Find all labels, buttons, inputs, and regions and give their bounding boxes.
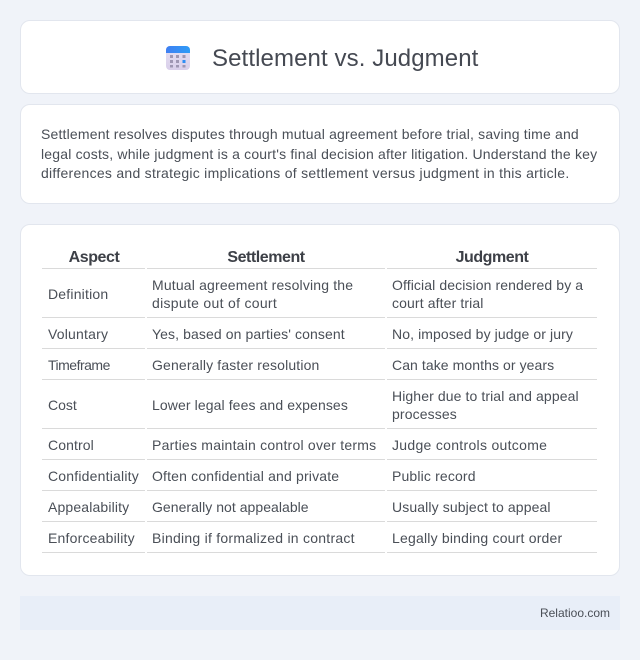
table header: Judgment: [456, 249, 528, 266]
row: cost: processes: [392, 406, 457, 422]
panel: title card: [20, 20, 620, 94]
row: cost: Higher due to trial and appeal: [392, 388, 579, 404]
row: definition: Mutual agreement resolving the: [152, 277, 353, 293]
row: timeframe: [48, 357, 554, 373]
row: appealability: [48, 499, 551, 515]
row: voluntary: Voluntary: [48, 326, 108, 342]
row: definition: court after trial: [392, 295, 484, 311]
row: cost: Lower legal fees and expenses: [152, 397, 348, 413]
row: enforceability: Legally binding court order: [392, 530, 562, 546]
text block: intro: [41, 126, 598, 181]
icon: calendar: [166, 46, 190, 70]
footer credit: Relatioo.com: [540, 606, 610, 620]
row: appealability: Usually subject to appeal: [392, 499, 551, 515]
text block: intro: differences and strategic implications of settlement versus judgment in this article.: [41, 165, 570, 181]
row: timeframe: Can take months or years: [392, 357, 554, 373]
title: Settlement vs. Judgment: [212, 45, 478, 72]
text block: intro: legal costs, while judgment is a court's final decision after litigation. Understand the key: [41, 146, 597, 162]
row: control: Parties maintain control over terms: [152, 437, 376, 453]
row: confidentiality: Public record: [392, 468, 476, 484]
row: definition: [48, 277, 584, 311]
row: voluntary: [48, 326, 573, 342]
text block: intro: Settlement resolves disputes through mutual agreement before trial, saving time and: [41, 126, 579, 142]
footer: [20, 596, 620, 630]
row: enforceability: Enforceability: [48, 530, 135, 546]
row: appealability: Generally not appealable: [152, 499, 309, 515]
row: definition: dispute out of court: [152, 295, 277, 311]
row: timeframe: Timeframe: [48, 357, 110, 373]
row: cost: Cost: [48, 397, 77, 413]
table header: [69, 249, 529, 266]
row: confidentiality: Often confidential and private: [152, 468, 339, 484]
row: control: Control: [48, 437, 94, 453]
row: voluntary: Yes, based on parties' consent: [152, 326, 345, 342]
row: cost: [48, 388, 579, 422]
row: timeframe: Generally faster resolution: [152, 357, 319, 373]
row: control: [48, 437, 547, 453]
row: definition: Official decision rendered by a: [392, 277, 583, 293]
panel: comparison table: [20, 224, 620, 576]
row: appealability: Appealability: [48, 499, 129, 515]
panel: intro text: [20, 104, 620, 204]
table header: Settlement: [227, 249, 305, 266]
row: confidentiality: Confidentiality: [48, 468, 139, 484]
table header: Aspect: [69, 249, 119, 266]
row: voluntary: No, imposed by judge or jury: [392, 326, 573, 342]
row: control: Judge controls outcome: [392, 437, 547, 453]
row: confidentiality: [48, 468, 476, 484]
row: enforceability: [48, 530, 562, 546]
row: enforceability: Binding if formalized in contract: [152, 530, 355, 546]
row: definition: Definition: [48, 286, 108, 302]
